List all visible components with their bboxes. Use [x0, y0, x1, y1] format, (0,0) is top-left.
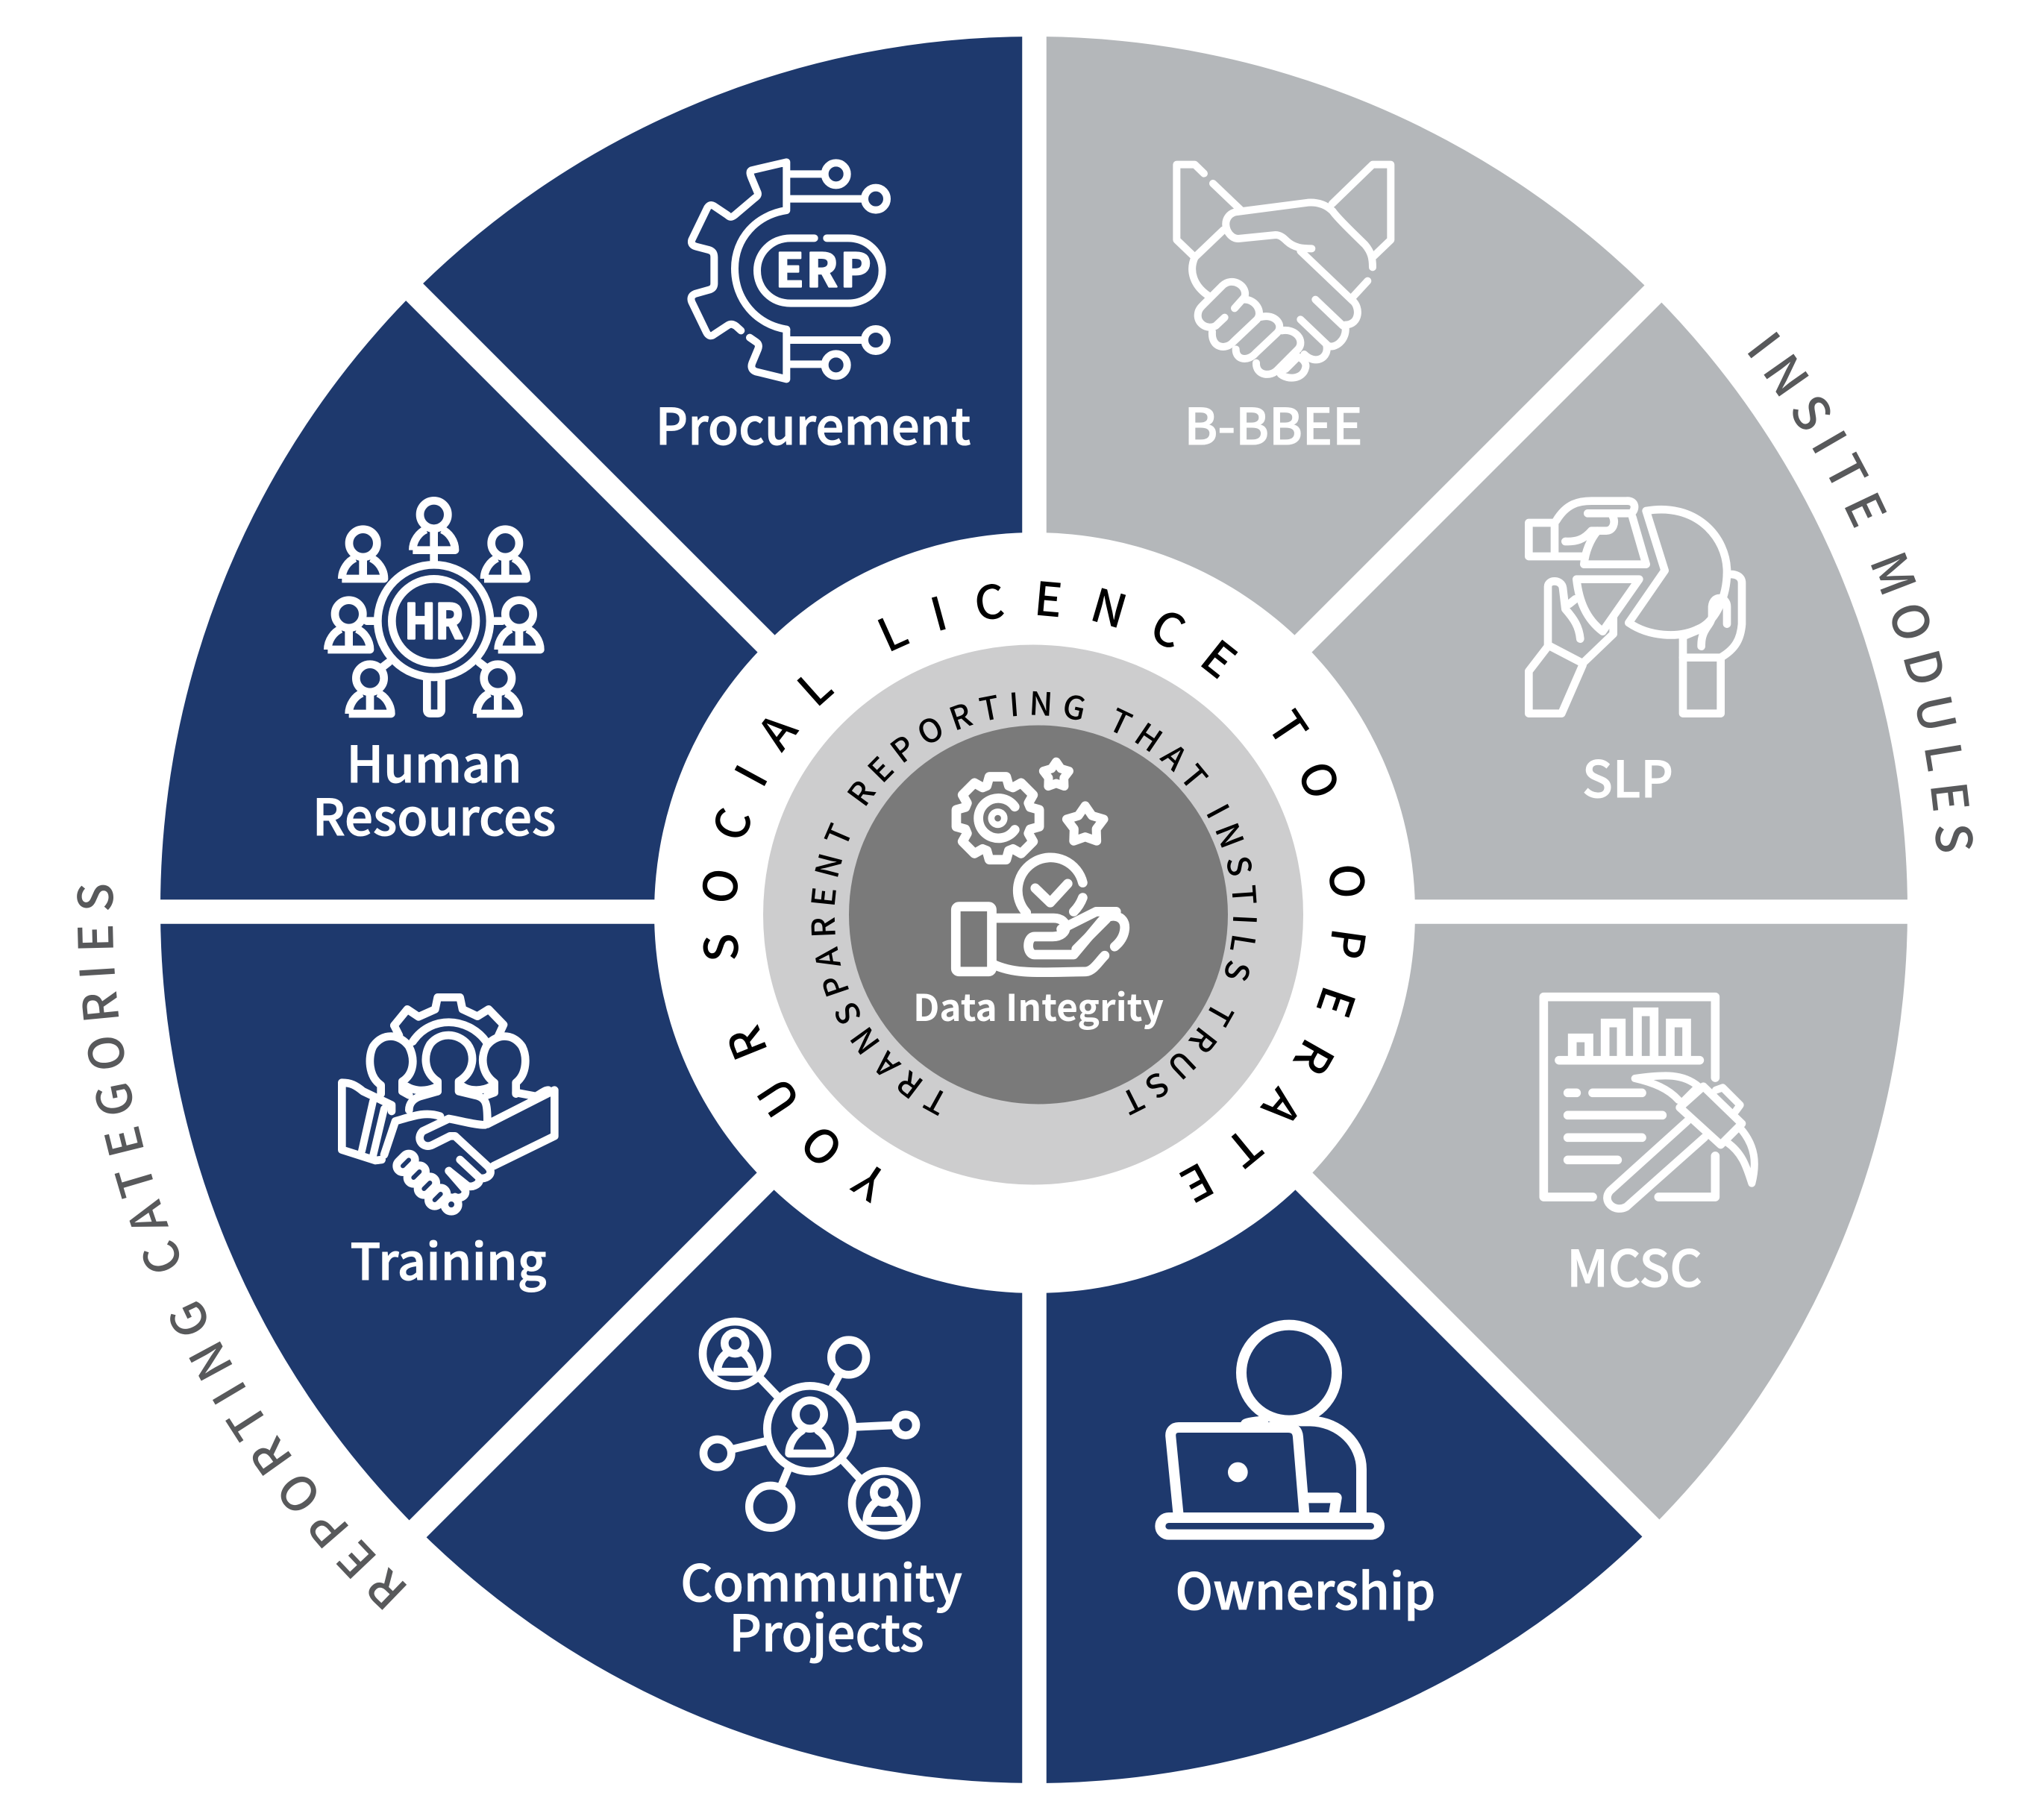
panel: Community Projects sector	[418, 912, 1034, 1783]
label: Training: Training	[350, 1222, 547, 1295]
panel: MCSC sector	[1034, 912, 1907, 1529]
label: Projects: Projects	[729, 1594, 924, 1666]
icon: MCSC report and pickaxe	[1543, 997, 1755, 1209]
icon: data integrity gear, stars and hand	[956, 761, 1125, 973]
label: MCSC: MCSC	[1567, 1229, 1702, 1301]
icon: Human Resources people around HR: HR	[404, 584, 463, 653]
icon: Training gear, people and handshake	[342, 997, 554, 1211]
icon: Ownership person at laptop	[1160, 1325, 1379, 1535]
panel: SLP sector	[1034, 294, 1907, 912]
icon: ERP gear	[691, 162, 887, 379]
panel: B-BBEE sector	[1034, 37, 1653, 912]
side label: Insite Modules: INSITE MODULES	[1747, 331, 1973, 852]
label: B-BBEE: B-BBEE	[1184, 387, 1363, 459]
icon: Community Projects network	[703, 1322, 917, 1536]
label: Resources line: Resources	[313, 778, 556, 850]
label: SLP: SLP	[1582, 740, 1673, 812]
label: Human Resources: Human	[346, 725, 522, 797]
inner ring text: Transparent reporting that instils trust: TRANSPARENT REPORTING THAT INSTILS TRUST	[811, 691, 1257, 1116]
outer ring text: Your Social Licence to Operate: YOUR SOCIAL LICENCE TO OPERATE	[703, 581, 1366, 1204]
panel: Procurement sector	[415, 37, 1034, 912]
dark grey centre disc	[849, 725, 1228, 1104]
panel: Ownership sector	[1034, 912, 1650, 1783]
icon: SLP hands and pie chart	[1529, 501, 1742, 714]
panel: Training sector	[160, 912, 1034, 1529]
label: Procurement: Procurement	[656, 387, 971, 459]
icon: B-BBEE handshake	[1176, 165, 1391, 378]
label: Ownership: Ownership	[1175, 1552, 1436, 1624]
icon: ERP gear: ERP	[775, 233, 874, 300]
label: Data Integrity: Data Integrity	[913, 978, 1164, 1032]
label: Community: Community	[680, 1544, 962, 1616]
panel: Human Resources sector	[160, 291, 1035, 912]
light grey ring	[763, 644, 1303, 1184]
white hub ring	[654, 532, 1415, 1293]
icon: Human Resources people around HR	[327, 500, 540, 714]
side label: Reporting Categories: REPORTING CATEGORIES	[77, 885, 407, 1610]
